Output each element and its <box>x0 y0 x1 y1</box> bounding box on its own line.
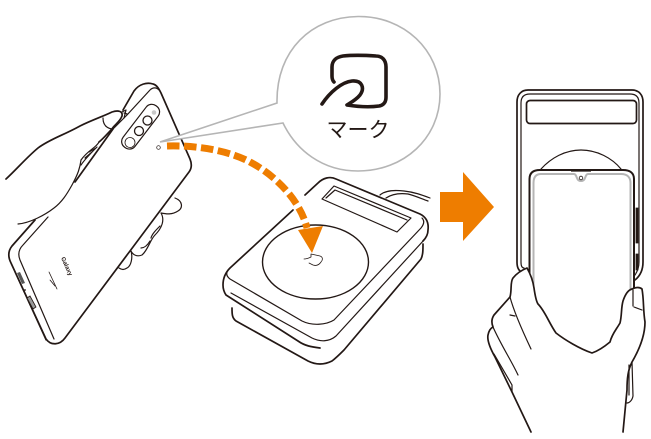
phone side ports <box>17 272 36 309</box>
large orange arrow <box>440 172 494 241</box>
mark label: マーク <box>326 119 390 142</box>
brand text on phone: Galaxy <box>59 256 73 278</box>
phone body <box>9 83 191 344</box>
phone label lines <box>49 272 57 289</box>
left phone held in hand <box>6 83 191 344</box>
right phone front <box>530 170 634 355</box>
dashed orange arrow <box>167 146 323 253</box>
charger <box>223 178 430 364</box>
small mark on phone <box>157 146 160 149</box>
icon: small mark on pad <box>304 254 322 265</box>
speech bubble <box>160 16 440 171</box>
camera module <box>119 102 162 152</box>
charger display window <box>322 186 411 232</box>
charger cable <box>380 190 430 201</box>
holding hand right <box>488 268 645 432</box>
phone fingers behind <box>119 198 181 270</box>
holding hand <box>6 110 127 224</box>
charger front view <box>517 90 643 280</box>
charger lid outline <box>223 178 428 348</box>
right scene: phone on charger <box>488 90 645 432</box>
charging pad circle <box>262 225 368 299</box>
icon: mark symbol <box>322 55 386 107</box>
charger base <box>232 244 423 364</box>
